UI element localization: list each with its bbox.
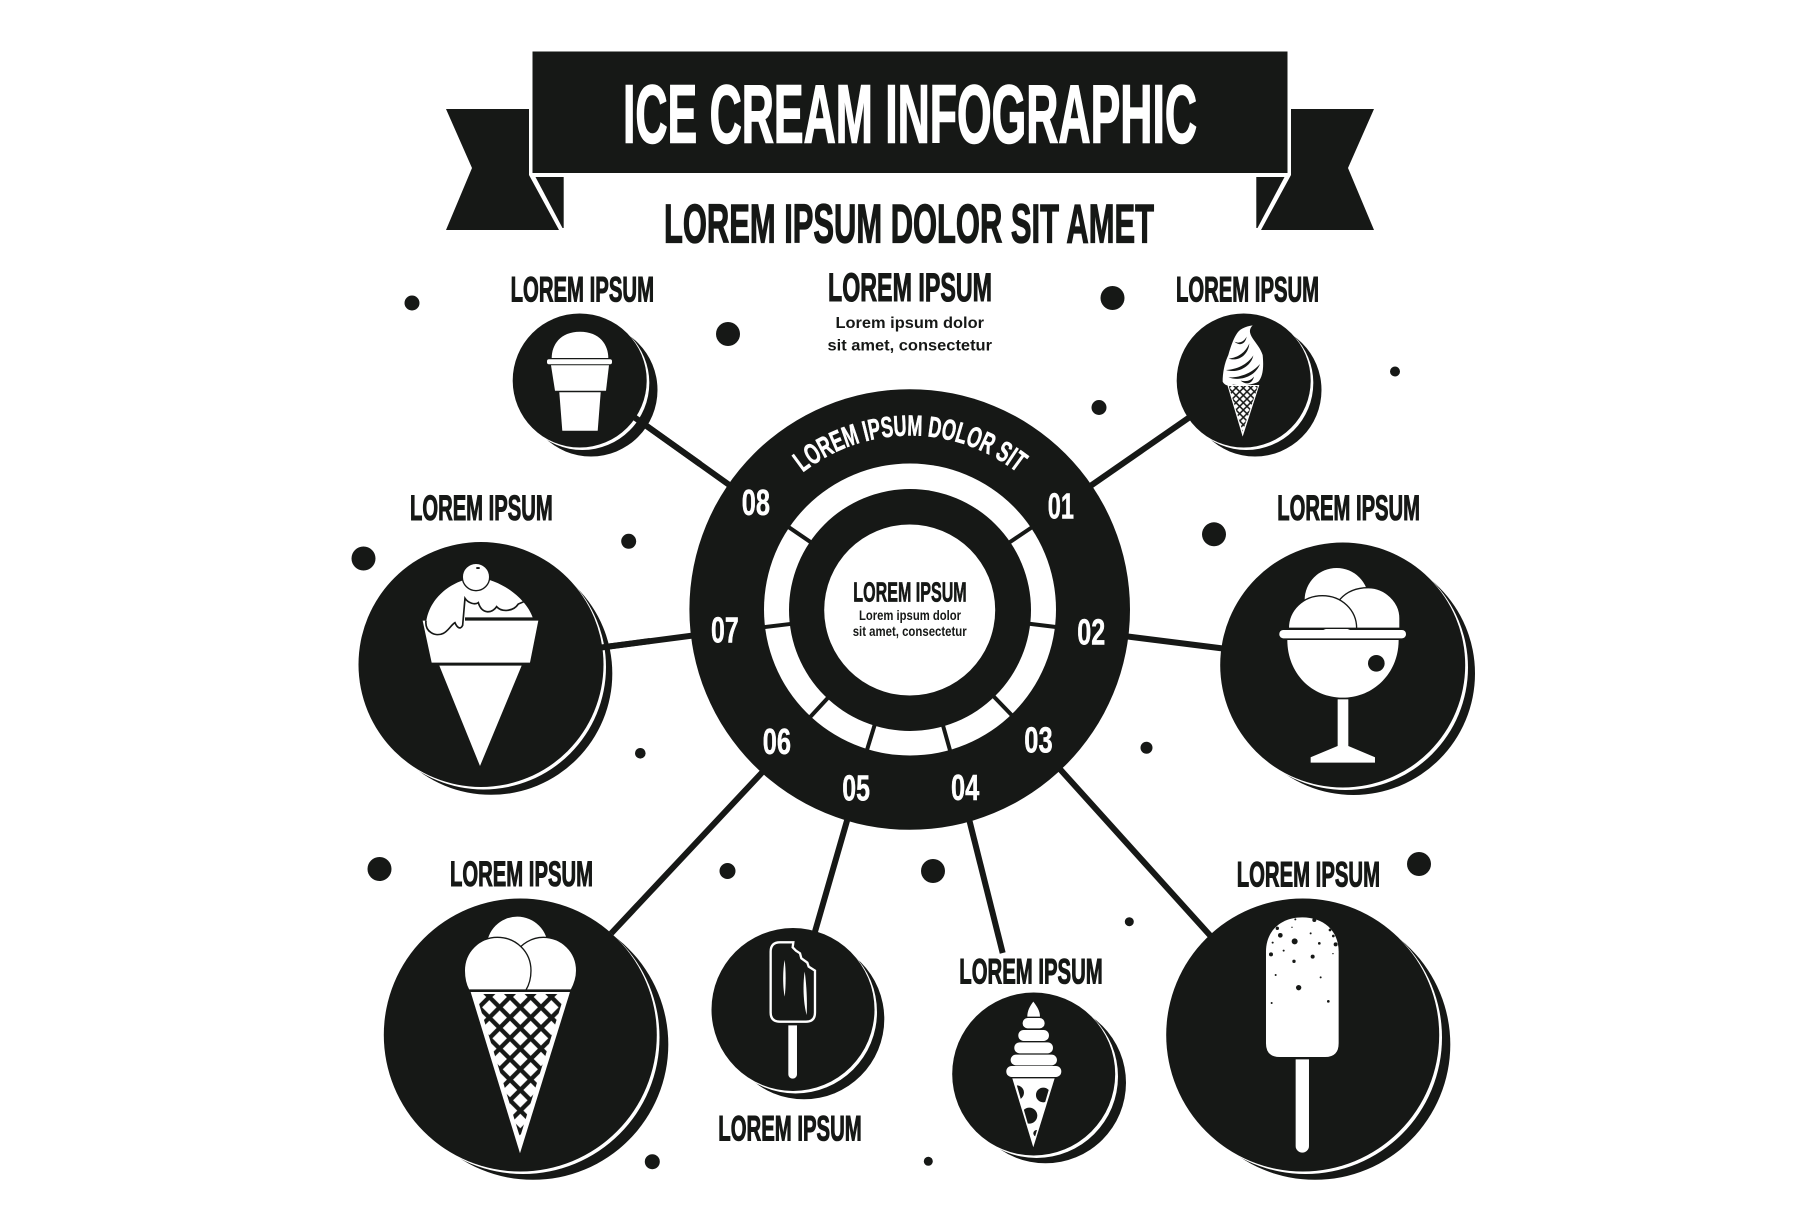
icon: bitten popsicle (771, 942, 815, 1079)
banner body (532, 52, 1288, 173)
label: LOREM IPSUM (718, 1109, 862, 1149)
connector lines (590, 407, 1235, 953)
item: top-left cup (511, 270, 700, 464)
badge circle (1166, 898, 1450, 1180)
step numbers: 06 (763, 721, 791, 762)
step numbers: 04 (951, 767, 979, 808)
curved heading: LOREM IPSUM DOLOR SIT (792, 415, 1030, 472)
icon: sundae cone (423, 563, 538, 766)
inner dark disc (789, 489, 1031, 731)
icon: cup (547, 332, 612, 431)
label: LOREM IPSUM (1237, 854, 1380, 894)
item: bottom-left waffle cone (384, 854, 668, 1180)
top center body line 1: Lorem ipsum dolor (836, 315, 984, 332)
center white disc (824, 524, 995, 696)
item: bottom-right sprinkled popsicle (1166, 854, 1450, 1180)
icon: waffle cone (464, 917, 577, 1153)
badge circle (712, 928, 884, 1099)
title banner (446, 52, 1374, 230)
step numbers (711, 482, 1105, 809)
step numbers: 05 (842, 768, 870, 809)
icon: soft serve cone (1223, 325, 1263, 437)
label: LOREM IPSUM (450, 854, 593, 894)
badge circle (1177, 314, 1322, 456)
icon: spiral cone (1006, 1002, 1061, 1147)
label: LOREM IPSUM (511, 270, 654, 310)
outer disc (689, 389, 1130, 830)
ribbon right tail (1256, 109, 1374, 230)
center heading: LOREM IPSUM (853, 576, 967, 607)
top center body line 2: sit amet, consectetur (828, 338, 992, 354)
decorative dots (352, 286, 1431, 1169)
central diagram (689, 389, 1130, 830)
item: top-right soft serve (1176, 270, 1322, 456)
item: spiral cone (952, 951, 1126, 1163)
top center heading: LOREM IPSUM (828, 266, 992, 310)
icon: goblet (1279, 568, 1406, 763)
step numbers: 07 (711, 610, 739, 651)
subtitle: LOREM IPSUM DOLOR SIT AMET (664, 194, 1154, 254)
step numbers: 01 (1048, 485, 1074, 526)
step numbers: 08 (742, 482, 770, 523)
center body line 1: Lorem ipsum dolor (859, 608, 962, 623)
item: right goblet (1220, 488, 1475, 795)
badge circle (384, 898, 668, 1180)
step numbers: 02 (1077, 611, 1105, 652)
label: LOREM IPSUM (410, 488, 553, 528)
label: LOREM IPSUM (959, 951, 1103, 991)
item: left sundae cone (358, 488, 650, 795)
badge circle (952, 992, 1126, 1163)
item: bitten popsicle (712, 928, 884, 1149)
label: LOREM IPSUM (1176, 270, 1319, 310)
badge circle (358, 542, 650, 795)
badge circle (1220, 542, 1475, 795)
white ring (764, 464, 1056, 756)
top center text block (828, 266, 992, 354)
badge circle (513, 314, 700, 464)
ribbon left tail (446, 109, 564, 230)
label: LOREM IPSUM (1277, 488, 1420, 528)
title text: ICE CREAM INFOGRAPHIC (623, 68, 1197, 160)
step numbers: 03 (1024, 720, 1053, 761)
icon: sprinkled popsicle (1266, 917, 1339, 1153)
center body line 2: sit amet, consectetur (853, 624, 967, 639)
ring separators (761, 525, 1059, 754)
